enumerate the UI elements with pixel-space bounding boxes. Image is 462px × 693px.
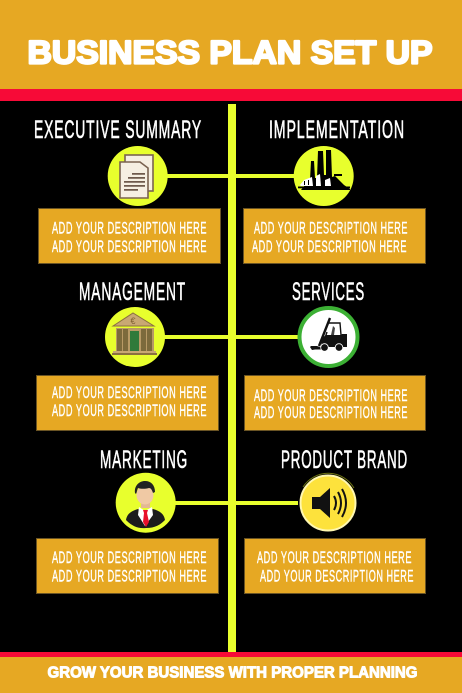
euro sign: € [130,316,136,326]
description box: ADD YOUR DESCRIPTION HERE [52,549,207,567]
icon: factory [294,146,354,206]
description box: ADD YOUR DESCRIPTION HERE [52,568,207,586]
icon: bank [105,307,165,367]
panel: services [244,278,426,430]
header band [0,0,462,101]
description box [38,208,220,264]
central timeline line [228,104,236,652]
heading: marketing: MARKETING [100,446,188,474]
description box: ADD YOUR DESCRIPTION HERE [52,220,207,238]
description box [36,538,218,594]
description box [244,376,426,430]
description box [36,376,218,430]
icon: businessman [116,473,176,533]
heading: services: SERVICES [292,278,365,306]
title: BUSINESS PLAN SET UP [28,34,432,70]
icon: speaker [300,473,356,530]
connector lines [163,174,300,505]
icon: documents [108,146,168,206]
panel: executive summary [34,116,220,264]
description box: ADD YOUR DESCRIPTION HERE [52,402,207,420]
heading: executive summary: EXECUTIVE SUMMARY [34,116,202,144]
footer band [0,652,462,693]
description box: ADD YOUR DESCRIPTION HERE [52,384,207,402]
icon: forklift [300,308,358,366]
footer tagline: GROW YOUR BUSINESS WITH PROPER PLANNING [48,664,418,682]
panel: implementation [244,116,426,264]
description box: ADD YOUR DESCRIPTION HERE [52,238,207,256]
panel: marketing [36,446,218,594]
description box [244,538,426,594]
description box [244,208,426,264]
panel: product brand [244,446,426,594]
panel: management [36,278,218,430]
heading: management: MANAGEMENT [79,278,186,306]
